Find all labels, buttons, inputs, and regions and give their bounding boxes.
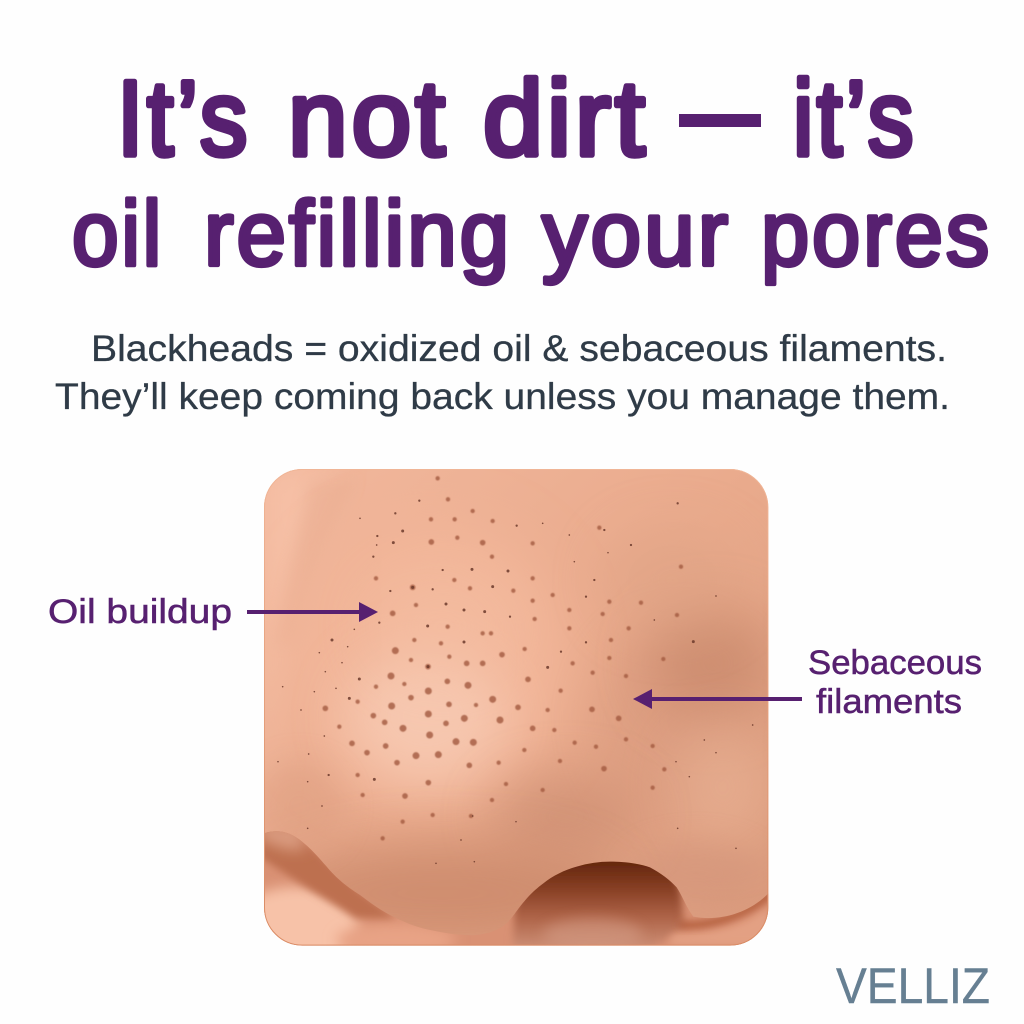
label: sebaceous filaments xyxy=(808,644,982,721)
title line 1: dirt xyxy=(483,58,649,178)
title line 1: It’s xyxy=(117,58,251,178)
right nostril opening xyxy=(510,862,687,944)
highlight xyxy=(346,650,506,783)
panel border xyxy=(264,469,768,946)
upper lip light xyxy=(265,881,363,945)
alar crease xyxy=(679,893,771,925)
left fold top soften xyxy=(265,832,308,856)
title line 2: pores xyxy=(761,183,992,285)
shadow below tip xyxy=(500,774,624,849)
dark fold right xyxy=(652,610,767,712)
title line 2: your xyxy=(542,183,731,285)
right wing highlight xyxy=(686,736,756,826)
label: sebaceous filaments: filaments xyxy=(816,683,962,721)
title line 1: not xyxy=(288,58,449,178)
pores: soft large xyxy=(325,478,681,838)
title xyxy=(72,58,992,285)
nose bridge tone xyxy=(304,491,328,538)
logo: VELLIZ xyxy=(836,958,990,1014)
panel: nose close-up xyxy=(264,469,768,946)
title line 1 xyxy=(117,58,917,178)
dark side xyxy=(599,627,759,813)
subtitle: Blackheads = oxidized oil & sebaceous filaments. xyxy=(91,328,947,369)
lip right xyxy=(671,911,766,944)
title line 2: refilling xyxy=(204,183,512,285)
title line 2: oil xyxy=(72,183,164,285)
subtitle: They’ll keep coming back unless you manage them. xyxy=(55,376,950,417)
arrow: sebaceous filaments xyxy=(633,689,802,709)
title line 1: it’s xyxy=(793,58,917,178)
left fold shadow xyxy=(259,827,396,918)
arrow: oil buildup xyxy=(247,602,378,622)
left cheek shading xyxy=(269,480,308,604)
pores: small dark xyxy=(278,501,753,863)
label: sebaceous filaments: Sebaceous xyxy=(808,644,982,682)
nostril speckle xyxy=(544,914,641,944)
area below nose xyxy=(264,831,768,946)
nose tip tone xyxy=(487,597,560,770)
label: oil buildup: Oil buildup xyxy=(48,593,232,631)
subtitle xyxy=(55,328,950,417)
title line 2 xyxy=(72,183,992,285)
